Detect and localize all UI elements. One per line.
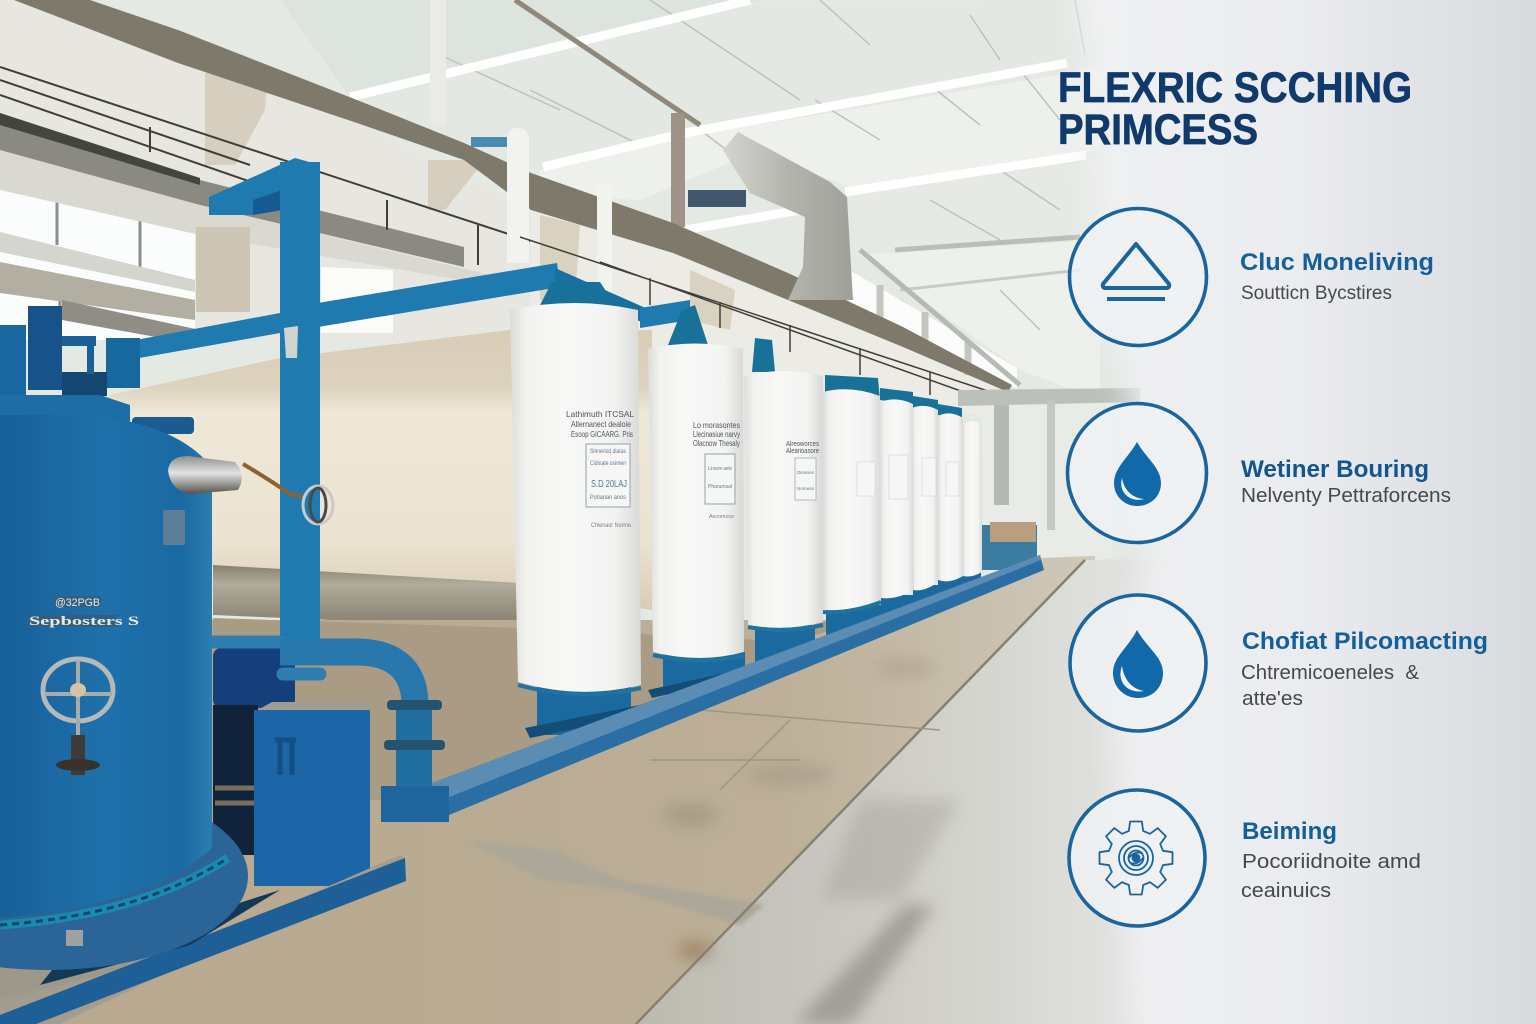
cylinder 1 label: Allernanect dealoie	[571, 419, 631, 429]
window opening beyond frame	[321, 267, 393, 333]
white side panel overlay	[1074, 0, 1536, 1024]
cylinder 3 label: Dinaries	[797, 470, 815, 475]
icon: water drop in circle	[1068, 404, 1206, 542]
light walkway	[636, 555, 1300, 1024]
blue floor rail	[408, 555, 1044, 822]
nameplate: Sepbosters S	[29, 614, 139, 628]
text	[1241, 662, 1420, 710]
text: Chtremicoeneles &	[1241, 662, 1420, 684]
cylinder 2 label: Llecinasiue narvy	[693, 430, 740, 439]
text: Pocoriidnoite amd	[1242, 851, 1421, 873]
cylinder 1 label: Chienaor Norme	[591, 522, 631, 529]
tank body	[0, 415, 212, 918]
grey roof beam	[0, 113, 464, 267]
floor stains	[662, 660, 960, 1024]
silver tubes	[215, 788, 268, 803]
silver faucet	[168, 456, 305, 497]
cylinders far to near	[963, 421, 982, 576]
corbels	[205, 73, 268, 165]
step 3: chemical drop item	[1070, 595, 1488, 731]
beige tank behind	[110, 330, 652, 610]
concrete floor	[0, 555, 1300, 1024]
icon: chemical drop in circle	[1070, 595, 1206, 731]
icon: gear in circle	[1069, 790, 1205, 926]
step 1: lift item	[1070, 208, 1434, 346]
tank lid	[0, 395, 130, 422]
hand wheel valve	[43, 659, 113, 775]
cylinder 2 label: Lo morasontes	[693, 421, 740, 430]
white vertical pipes	[471, 128, 612, 293]
title: FLEXRIC SCCHING	[1058, 64, 1412, 112]
far end of hall	[958, 388, 1140, 570]
tank top machinery	[0, 306, 107, 396]
text: Nelventy Pettraforcens	[1241, 485, 1451, 507]
vertical pipe and flanges	[396, 702, 432, 790]
windows	[0, 187, 195, 340]
overhead main pipe	[14, 0, 1012, 392]
cylinder 1 label: Sinneriod diatas	[590, 449, 626, 455]
cylinder 2 label: Olacnow Thesaly	[693, 439, 740, 448]
cylinder 1 label: Esoop GICAARG. Pris	[571, 429, 633, 439]
cylinder 3 label: Alreoworces	[786, 441, 819, 448]
small side plate	[163, 510, 185, 545]
grey horizontal pipe	[213, 565, 520, 628]
blue base frame	[0, 855, 406, 1024]
silver ventilation duct	[723, 132, 853, 300]
heading: Chofiat Pilcomacting	[1242, 628, 1488, 655]
silver bolt	[66, 930, 83, 946]
text: atte'es	[1242, 688, 1303, 710]
title	[1058, 64, 1412, 154]
dark pump motor	[213, 648, 295, 708]
step 2: water drop item	[1068, 404, 1451, 542]
left wall and windows	[0, 0, 557, 345]
ceiling panels	[280, 0, 1100, 400]
pipe base block	[381, 786, 449, 822]
text: Soutticn Bycstires	[1241, 282, 1392, 304]
cylinder 1 label	[566, 409, 634, 529]
top caps	[540, 282, 962, 420]
cylinder 2 label: Aecomoce	[709, 514, 734, 520]
blue pedestals	[525, 570, 981, 738]
cylinder 3 label: Nomeas	[797, 486, 815, 491]
heading: Beiming	[1242, 818, 1337, 845]
text	[1241, 851, 1421, 902]
rails	[0, 67, 557, 265]
heading: Cluc Moneliving	[1240, 249, 1434, 276]
filter cylinders row	[510, 282, 982, 738]
floor joints	[636, 560, 1085, 1024]
cylinder 3 label	[786, 441, 819, 500]
cylinder 1 label: Cidinate osimen	[590, 461, 626, 467]
icon: triangle in circle	[1070, 208, 1206, 346]
cylinder 2 label: Pharumsal	[708, 484, 732, 490]
flange bands	[518, 602, 881, 694]
text: ceainuics	[1241, 880, 1331, 902]
nameplate	[28, 596, 139, 628]
catwalk railing	[520, 237, 1000, 405]
cylinder 3 label: Aleanoasore	[786, 448, 819, 455]
grey wedge patch	[465, 840, 765, 925]
cylinder 1 label: S.D 20LAJ	[591, 479, 627, 490]
small fittings	[132, 417, 194, 434]
blue box	[254, 702, 370, 886]
base ring	[0, 782, 248, 970]
tank bottom band	[0, 858, 228, 925]
cylinder 1 label: Lathimuth ITCSAL	[566, 409, 634, 419]
cylinder 1 label: Potiarian anos	[590, 495, 626, 501]
large blue tank	[0, 306, 333, 946]
heading: Wetiner Bouring	[1241, 456, 1429, 483]
gauge	[303, 486, 333, 524]
far cylinder labels	[857, 455, 959, 499]
catwalk wall and far windows	[530, 190, 1020, 420]
title: PRIMCESS	[1058, 106, 1258, 154]
cylinder 2 label: Linsom aeto	[708, 466, 732, 472]
brown column	[671, 113, 685, 227]
cylinder 2 label	[693, 421, 740, 520]
step 4: gear item	[1069, 790, 1421, 926]
nameplate: @32PGB	[55, 597, 100, 609]
horizontal pipes	[213, 642, 320, 674]
blue steel frame	[106, 158, 690, 642]
pump group	[213, 642, 449, 886]
ceiling tie bars	[895, 237, 1080, 250]
